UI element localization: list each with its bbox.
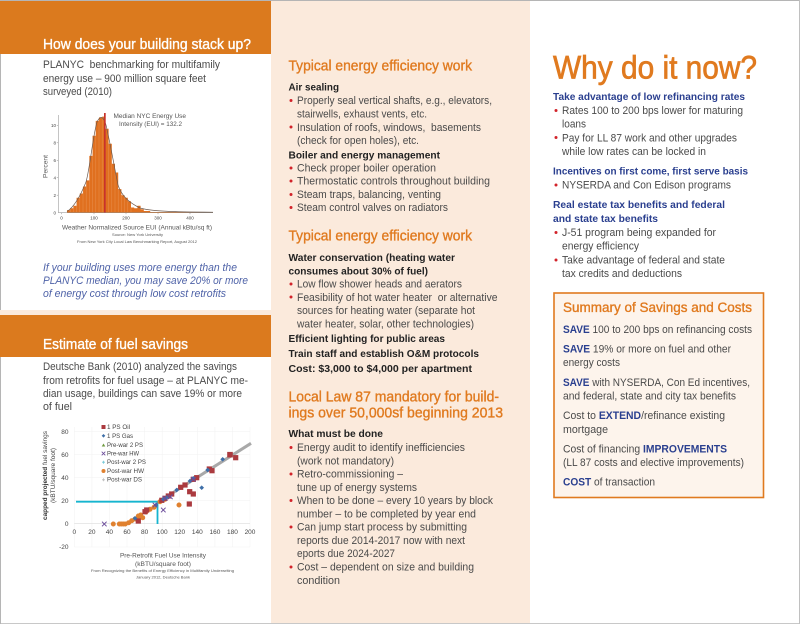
list: what must be done: tune up of energy systems [297, 482, 417, 494]
axis labels: 0 [53, 210, 56, 215]
chart caption: From New York City Local Law Benchmarking Report, August 2012 [77, 239, 198, 244]
axis labels [42, 123, 194, 220]
list: tax benefits: Take advantage of federal and state [562, 254, 725, 266]
chart caption: From Recognizing the Benefits of Energy Efficiency in Multifamily Underwriting [91, 568, 234, 573]
chart caption [62, 224, 212, 244]
axes [57, 115, 213, 214]
text block: summary items: SAVE 100 to 200 bps on refinancing costs [563, 324, 752, 336]
median line [104, 113, 106, 213]
axis labels: 300 [154, 216, 162, 220]
list: tax benefits: J-51 program being expanded for [562, 227, 716, 239]
x axis numbers: 80 [141, 529, 149, 536]
list: air sealing: (check for open holes), etc. [297, 135, 419, 147]
y axis numbers [59, 429, 69, 551]
heading: typical work one: Typical energy efficiency work [288, 59, 473, 75]
text block: summary items: and federal, state and city tax benefits [563, 390, 736, 402]
y axis numbers: 40 [61, 475, 69, 482]
list: what must be done: Cost – dependent on size and building [297, 562, 474, 574]
data: 1 PS gas [133, 457, 225, 520]
list: refinancing rates [553, 91, 745, 158]
legend: Post-war DS [107, 476, 143, 484]
list: air sealing [288, 82, 492, 147]
list: water conservation: Feasibility of hot water heater or alternative [297, 292, 498, 304]
chart: fuel savings scatter [42, 424, 256, 580]
list: boiler and energy management: Steam traps, balancing, venting [297, 189, 441, 201]
trend line [157, 443, 251, 503]
list: what must be done: eports due 2024-2027 [297, 548, 395, 560]
chart caption: Source: New York University [112, 232, 163, 237]
y axis numbers: 0 [65, 521, 69, 528]
list: what must be done [288, 428, 493, 587]
axis labels: 2 [53, 193, 56, 198]
callout: savings statement [43, 262, 248, 300]
x axis numbers: 60 [123, 529, 131, 536]
legend: Post-war HW [107, 468, 145, 475]
y axis numbers: -20 [59, 544, 69, 551]
list: refinancing rates: Take advantage of low refinancing rates [553, 91, 745, 103]
heading: Local Law 87: ings over 50,000sf beginning 2013 [288, 406, 503, 422]
list: refinancing rates: Pay for LL 87 work and other upgrades [562, 132, 737, 144]
legend: Post-war 2 PS [107, 459, 147, 466]
heading: summary: Summary of Savings and Costs [563, 300, 752, 315]
text block: summary items [563, 324, 752, 488]
chart caption: Weather Normalized Source EUI (Annual kBtu/sq ft) [62, 224, 212, 232]
y axis numbers: 20 [61, 498, 69, 505]
text block: other measures: Efficient lighting for public areas [288, 333, 445, 345]
text block: Deutsche Bank intro [43, 361, 248, 413]
list: incentives [553, 166, 748, 192]
y axis numbers: 60 [61, 452, 69, 459]
text block: summary items: SAVE with NYSERDA, Con Ed incentives, [563, 377, 750, 389]
data: post-war HW [111, 497, 181, 526]
list: air sealing: Air sealing [288, 82, 339, 94]
legend: Pre-war 2 PS [107, 442, 144, 449]
list: tax benefits: tax credits and deductions [562, 268, 682, 280]
list: what must be done: Can jump start process by submitting [297, 522, 467, 534]
list: what must be done: number – to be completed by year end [297, 508, 476, 520]
data: pre-war HW [102, 477, 196, 526]
x axis numbers: 20 [88, 529, 96, 536]
text block: Deutsche Bank intro: from retrofits for fuel usage – at PLANYC me- [43, 375, 248, 387]
legend: Pre-war HW [107, 450, 140, 458]
heading: Local Law 87 [288, 389, 503, 422]
list: boiler and energy management [288, 149, 490, 214]
callout: savings statement: of energy cost through low cost retrofits [43, 288, 226, 300]
benchmark guide lines [76, 502, 158, 524]
heading band: Estimate of fuel savings [0, 315, 271, 357]
list: what must be done: When to be done – every 10 years by block [297, 495, 493, 507]
y axis title [42, 430, 57, 520]
axis labels: 10 [51, 123, 56, 128]
heading: Local Law 87: Local Law 87 mandatory for build- [288, 389, 499, 405]
axis labels: 200 [122, 216, 130, 220]
text block: other measures [288, 333, 479, 375]
histogram bars [67, 117, 213, 213]
x axis numbers: 180 [227, 529, 238, 536]
x axis numbers: 100 [157, 529, 168, 536]
title: Why do it now? [553, 50, 757, 86]
text block: Deutsche Bank intro: of fuel [43, 401, 72, 413]
axis labels: 400 [186, 216, 194, 220]
list: water conservation: consumes about 30% of fuel) [288, 266, 428, 278]
list: incentives: Incentives on first come, first serve basis [553, 166, 748, 178]
list: boiler and energy management: Thermostatic controls throughout building [297, 176, 490, 188]
x axis numbers: 200 [245, 529, 256, 536]
text block: summary items: Cost to EXTEND/refinance existing [563, 410, 725, 422]
text block: benchmarking intro: energy use – 900 million square feet [43, 73, 206, 85]
text block: benchmarking intro [43, 59, 220, 98]
chart caption: Pre-Retrofit Fuel Use Intensity [120, 552, 207, 560]
text block: summary items: energy costs [563, 357, 620, 369]
axis labels: 4 [53, 175, 56, 180]
list: water conservation: Water conservation (heating water [288, 252, 455, 264]
heading: typical work two: Typical energy efficiency work [288, 229, 473, 245]
median annotation [114, 113, 186, 128]
list: what must be done: reports due 2014-2017 now with next [297, 535, 465, 547]
list: water conservation: sources for heating water (separate hot [297, 305, 475, 317]
list: air sealing: stairwells, exhaust vents, etc. [297, 108, 427, 120]
text block: benchmarking intro: PLANYC benchmarking for multifamily [43, 59, 220, 71]
panel: fuel savings [0, 315, 271, 580]
chart caption: (kBTU/square foot) [135, 561, 191, 568]
text block: Deutsche Bank intro: Deutsche Bank (2010) analyzed the savings [43, 361, 237, 373]
text block: Deutsche Bank intro: dian usage, buildings can save 19% or more [43, 388, 242, 400]
heading band: Estimate of fuel savings: Estimate of fuel savings [43, 337, 188, 353]
median annotation: Intensity (EUI) = 132.2 [119, 121, 182, 128]
text block: other measures: Cost: $3,000 to $4,000 per apartment [288, 363, 472, 375]
callout: savings statement: If your building uses more energy than the [43, 262, 237, 274]
x axis numbers: 0 [72, 529, 76, 536]
axis labels: 6 [53, 158, 56, 163]
chart caption [91, 552, 234, 580]
x axis numbers: 40 [106, 529, 113, 536]
list: what must be done: Energy audit to identify inefficiencies [297, 442, 465, 454]
list: tax benefits: energy efficiency [562, 240, 639, 252]
x axis numbers [72, 529, 256, 536]
chart caption: January 2012, Deutsche Bank [136, 574, 190, 580]
text block: summary items: Cost of financing IMPROVEMENTS [563, 444, 727, 456]
list: water conservation: Low flow shower heads and aerators [297, 279, 462, 291]
text block: benchmarking intro: surveyed (2010) [43, 86, 112, 98]
text block: summary items: mortgage [563, 424, 608, 436]
x axis numbers: 160 [209, 529, 221, 536]
list: what must be done: Retro-commissioning – [297, 469, 404, 481]
list: refinancing rates: loans [562, 118, 586, 130]
list: refinancing rates: while low rates can be locked in [561, 146, 706, 158]
list: tax benefits: and state tax benefits [553, 213, 658, 225]
chart: energy use histogram [42, 113, 213, 244]
text block: summary items: (LL 87 costs and elective improvements) [563, 457, 744, 469]
list: incentives: NYSERDA and Con Edison programs [562, 180, 731, 192]
heading band: How does your building stack up [0, 1, 271, 54]
heading band: How does your building stack up: How does your building stack up? [43, 37, 251, 53]
panel: summary of savings and costs [554, 293, 764, 498]
list: air sealing: Properly seal vertical shafts, e.g., elevators, [297, 95, 492, 107]
text block: summary items: COST of transaction [563, 476, 655, 488]
x axis numbers: 120 [174, 529, 186, 536]
panel: building benchmark [0, 1, 271, 300]
axis labels: Percent [42, 155, 50, 178]
list: tax benefits [553, 199, 725, 280]
list: water conservation [288, 252, 498, 330]
axis labels: 100 [90, 216, 98, 220]
list: boiler and energy management: Steam control valves on radiators [297, 202, 448, 214]
list: water conservation: water heater, solar, other technologies) [296, 318, 474, 330]
panel: centre column background [271, 0, 530, 624]
median annotation: Median NYC Energy Use [114, 113, 186, 120]
legend: 1 PS Oil [107, 424, 131, 431]
callout: savings statement: PLANYC median, you may save 20% or more [43, 275, 248, 287]
x axis numbers: 140 [192, 529, 203, 536]
list: boiler and energy management: Check proper boiler operation [297, 162, 436, 174]
text block: other measures: Train staff and establish O&M protocols [288, 348, 479, 360]
list: refinancing rates: Rates 100 to 200 bps lower for maturing [562, 105, 743, 117]
y axis title: capped projected fuel savings [42, 430, 49, 520]
list: what must be done: condition [297, 575, 340, 587]
list: what must be done: What must be done [288, 428, 383, 440]
panel: why do it now [553, 50, 764, 498]
list: tax benefits: Real estate tax benefits and federal [553, 199, 725, 211]
list: what must be done: (work not mandatory) [297, 455, 394, 467]
list: boiler and energy management: Boiler and energy management [288, 149, 440, 161]
axis labels: 0 [60, 216, 63, 220]
data: 1 PS oil [136, 452, 238, 523]
y axis title: (kBTU/square foot) [50, 448, 57, 503]
y axis numbers: 80 [61, 429, 69, 436]
text block: summary items: SAVE 19% or more on fuel and other [563, 344, 731, 356]
legend [102, 424, 147, 484]
panel: energy efficiency work [288, 59, 503, 587]
axis labels: 8 [53, 140, 56, 146]
legend: 1 PS Gas [107, 433, 134, 440]
list: air sealing: Insulation of roofs, windows, basements [297, 122, 481, 134]
